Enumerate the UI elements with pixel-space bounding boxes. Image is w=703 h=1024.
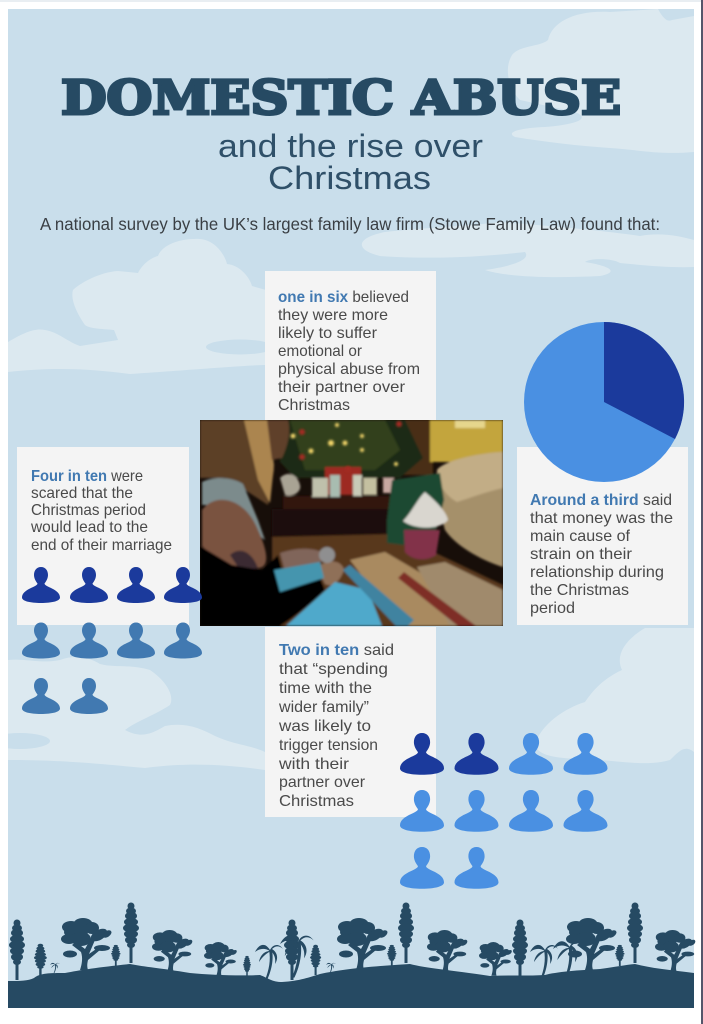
- hair and face: [200, 420, 274, 505]
- panel: two in ten card: with their: [278, 756, 350, 773]
- panel: four in ten card: would lead to the: [30, 519, 148, 536]
- icons: remaining people: [400, 733, 608, 889]
- panel: one in six card: they were more: [278, 307, 388, 324]
- subtitle: Christmas: [268, 160, 431, 196]
- gift bags and toy: [387, 473, 444, 545]
- panel: one in six card: emotional or: [278, 343, 363, 360]
- panel: two in ten card: wider family”: [278, 699, 369, 716]
- cloud: upper band right: [362, 222, 694, 277]
- icons: highlighted people: [400, 733, 499, 775]
- icon group: two in ten people: [400, 733, 608, 889]
- icons: highlighted people row: [22, 567, 202, 603]
- panel: one in six card: likely to suffer: [278, 325, 378, 342]
- panel: around a third card: that money was the: [530, 510, 673, 527]
- panel: around a third card: strain on their: [530, 546, 633, 563]
- panel: one in six card: physical abuse from: [278, 361, 420, 378]
- cloud: lower right: [535, 628, 694, 763]
- panel: four in ten card: Four in ten were: [31, 468, 143, 485]
- title: DOMESTIC ABUSE: [61, 71, 621, 126]
- icons: remaining people: [22, 622, 202, 714]
- cloud: lower left: [8, 657, 265, 770]
- landscape: treeline silhouette: [8, 902, 696, 1008]
- photo: woman wrapping presents by a Christmas tree: [200, 420, 503, 626]
- cloud: top right: [508, 9, 694, 153]
- panel: four in ten card: scared that the: [31, 485, 133, 502]
- icon group: four in ten people: [22, 567, 202, 714]
- cloud: left: [8, 239, 266, 374]
- panel: around a third card: Around a third said: [530, 492, 672, 509]
- panel: around a third card: main cause of: [530, 528, 631, 545]
- sofa: [440, 486, 503, 568]
- panel: around a third card: [517, 447, 688, 625]
- tree lights: [290, 423, 398, 466]
- intro text: A national survey by the UK’s largest family law firm (Stowe Family Law) found that:: [40, 214, 660, 234]
- panel: around a third card: period: [530, 600, 575, 617]
- wall and tree backdrop: [403, 420, 433, 475]
- panel: one in six card: Christmas: [278, 397, 350, 414]
- panel: around a third card: the Christmas: [530, 582, 629, 599]
- panel: four in ten card: [17, 447, 189, 625]
- subtitle: [218, 128, 483, 196]
- panel: one in six card: their partner over: [278, 379, 406, 396]
- panel: one in six card: one in six believed: [278, 289, 409, 306]
- panel: two in ten card: that “spending: [279, 661, 388, 678]
- panel: four in ten card: end of their marriage: [31, 537, 172, 554]
- panel: one in six card: [265, 271, 436, 420]
- floor: [272, 534, 503, 626]
- wrapping paper and rolls: [274, 562, 324, 592]
- panel: two in ten card: was likely to: [278, 718, 371, 735]
- panel: two in ten card: trigger tension: [279, 737, 378, 754]
- panel: two in ten card: [265, 627, 436, 817]
- panel: two in ten card: Two in ten said: [279, 642, 394, 659]
- panel: four in ten card: Christmas period: [31, 502, 146, 519]
- top, arm, sleeve: [202, 478, 265, 540]
- pie chart: around a third: [524, 322, 684, 482]
- subtitle: and the rise over: [218, 128, 483, 164]
- red box and cards: [325, 467, 361, 495]
- table: [283, 496, 391, 509]
- panel: two in ten card: partner over: [279, 774, 366, 791]
- panel: around a third card: relationship during: [530, 564, 664, 581]
- panel: two in ten card: time with the: [279, 680, 372, 697]
- panel: two in ten card: Christmas: [279, 793, 354, 810]
